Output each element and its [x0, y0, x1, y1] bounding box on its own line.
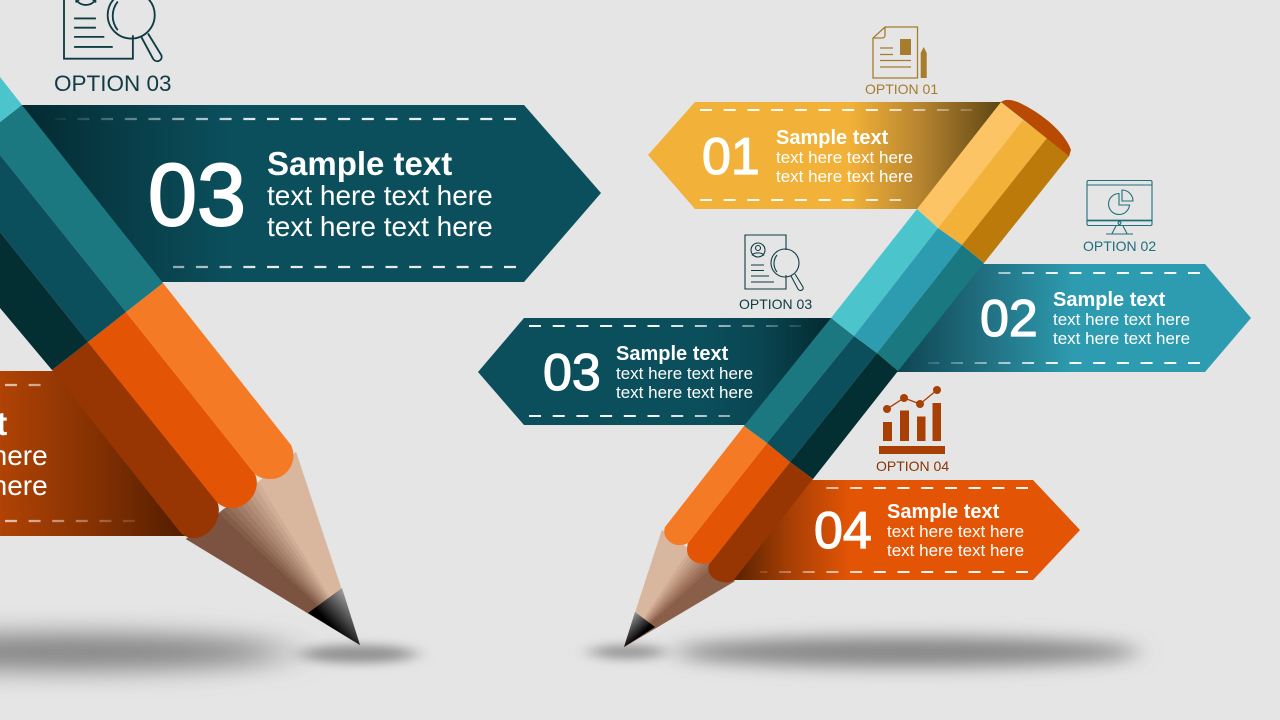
panel: ribbon 01: text here text here	[776, 167, 913, 186]
panel: ribbon 03	[478, 318, 836, 425]
panel: large ribbon 03: Sample text	[267, 145, 452, 182]
panel: ribbon 04	[722, 480, 1080, 580]
panel: ribbon 03: text here text here	[616, 364, 753, 383]
pencil lead tip	[308, 588, 360, 645]
panel: ribbon 04: 04	[814, 502, 872, 560]
panel: ribbon 01: text here text here	[776, 148, 913, 167]
panel: ribbon 02: 02	[980, 290, 1038, 348]
panel: large ribbon 03	[18, 105, 601, 282]
illustration: large left pencil	[0, 77, 360, 645]
panel: large ribbon 03: text here text here	[267, 180, 493, 211]
label: option 03: OPTION 03	[739, 296, 812, 312]
panel: large ribbon 03: text here text here	[267, 211, 493, 242]
icon: option 04 bar and line chart	[879, 386, 945, 454]
teal pencil barrel lower	[744, 318, 898, 479]
panel: ribbon 04: Sample text	[887, 501, 1000, 523]
panel: large ribbon 03: 03	[148, 145, 246, 244]
teal pencil barrel	[0, 77, 163, 370]
pencil wood cone	[186, 452, 360, 645]
label: option 04: OPTION 04	[876, 458, 949, 474]
shadow: large left pencil	[0, 634, 416, 670]
pencil wood cone	[624, 530, 735, 647]
label: option 01: OPTION 01	[865, 81, 938, 97]
panel: large ribbon 04 (cropped)	[0, 371, 200, 536]
panel: ribbon 03: text here text here	[616, 383, 753, 402]
icon: option 02 monitor with pie chart	[1087, 180, 1152, 234]
teal pencil barrel upper	[831, 209, 984, 371]
icon: large document with magnifier	[64, 0, 162, 61]
panel: ribbon 02: text here text here	[1053, 329, 1190, 348]
shadow: small right pencil	[590, 637, 1139, 667]
panel: ribbon 01: Sample text	[776, 127, 889, 149]
label: option 02: OPTION 02	[1083, 238, 1156, 254]
icon: option 03 document with magnifier	[745, 235, 803, 290]
pencil lead tip	[624, 612, 655, 647]
panel: ribbon 03: 03	[543, 344, 601, 402]
icon: option 01 document and pencil	[873, 27, 927, 78]
panel: ribbon 02	[890, 264, 1251, 372]
illustration: small right pencil	[624, 100, 1071, 647]
panel: ribbon 04: text here text here	[887, 541, 1024, 560]
panel: ribbon 04: text here text here	[887, 522, 1024, 541]
orange pencil barrel	[664, 426, 813, 582]
panel: ribbon 01	[648, 102, 1003, 209]
label: large option 03: OPTION 03	[54, 71, 172, 96]
panel: ribbon 03: Sample text	[616, 343, 729, 365]
panel: ribbon 02: text here text here	[1053, 310, 1190, 329]
orange pencil barrel	[52, 283, 293, 538]
panel: ribbon 01: 01	[702, 128, 760, 186]
red eraser cap	[1001, 100, 1071, 156]
panel: ribbon 02: Sample text	[1053, 289, 1166, 311]
yellow pencil barrel	[917, 102, 1070, 263]
